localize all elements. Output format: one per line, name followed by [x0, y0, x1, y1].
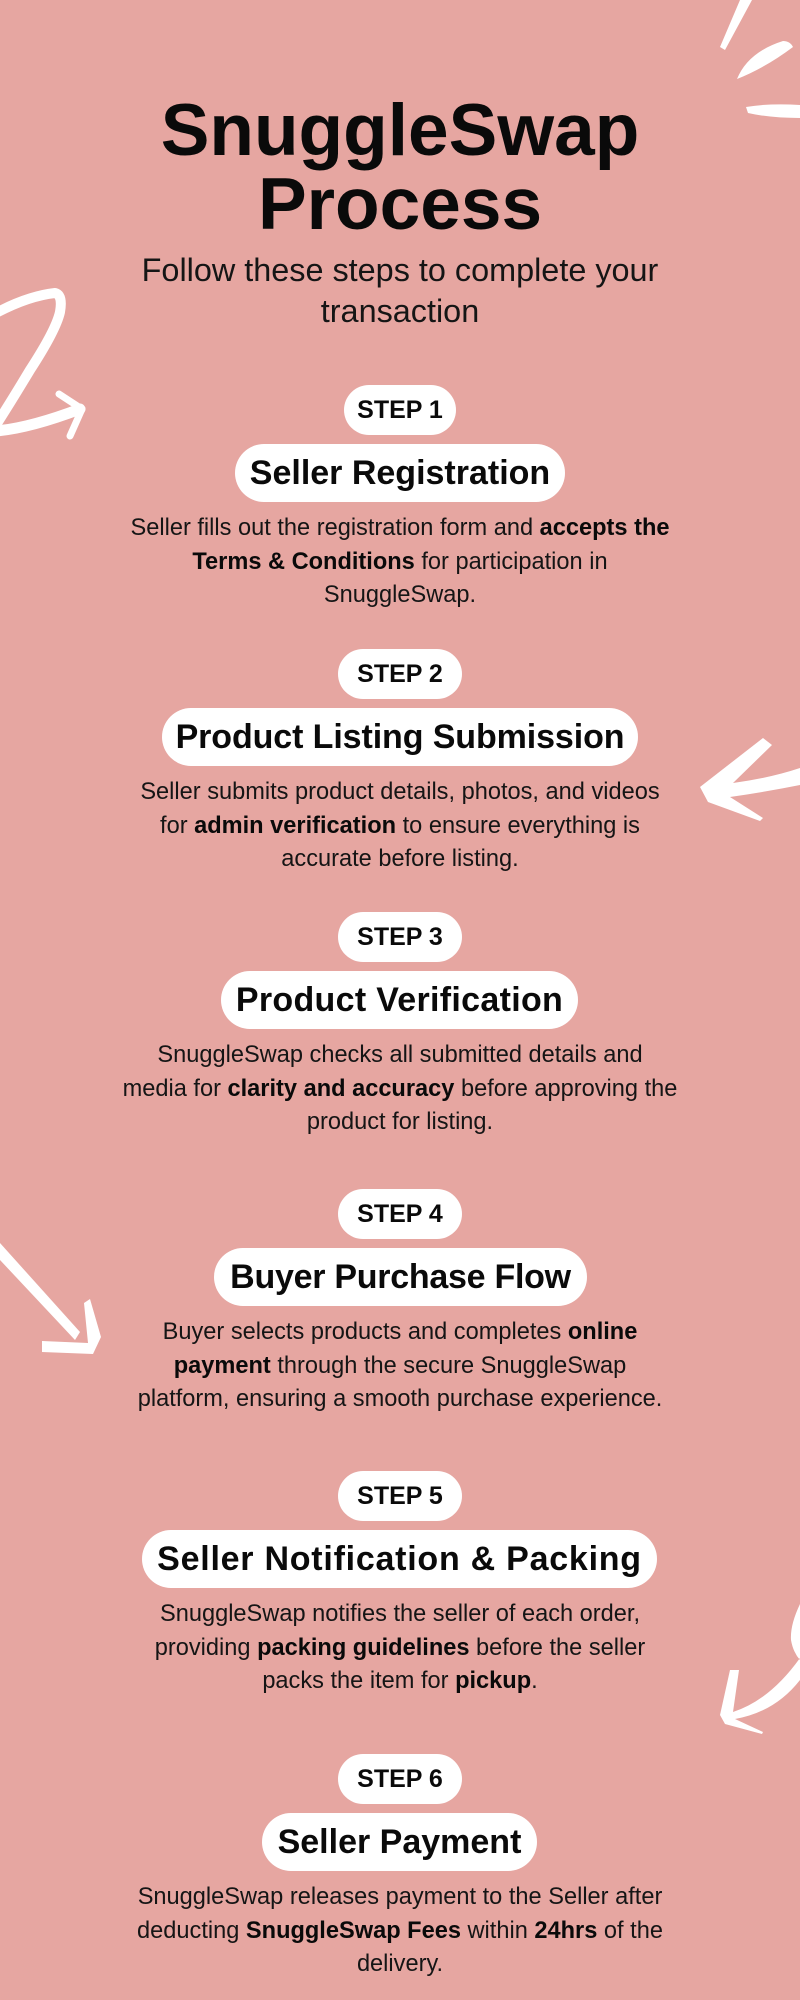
step 2 description: accurate before listing.: [281, 846, 519, 872]
step 6 heading: Seller Payment: [278, 1823, 521, 1861]
decorative arrow: pointing down-left beside step 5: [720, 1604, 800, 1734]
step 5 description: packs the item for pickup.: [262, 1668, 538, 1694]
step 5 heading: Seller Notification & Packing: [157, 1540, 642, 1578]
subtitle: Follow these steps to complete your: [142, 252, 658, 288]
title: [161, 90, 639, 245]
step 3 label: [338, 912, 462, 962]
step 2 label: [338, 649, 462, 699]
decorative arrow: pointing left beside step 2: [700, 738, 800, 821]
title: SnuggleSwap: [161, 90, 639, 171]
step 1 heading: [235, 444, 565, 502]
step 1 label: [344, 385, 456, 435]
step 1 description: [130, 515, 669, 608]
step 5 label: STEP 5: [357, 1482, 443, 1510]
step 4 description: payment through the secure SnuggleSwap: [174, 1352, 626, 1378]
step 4: [138, 1189, 662, 1412]
step 3 description: product for listing.: [307, 1109, 493, 1135]
step 1 description: Terms & Conditions for participation in: [192, 548, 608, 574]
step 5: [142, 1471, 657, 1694]
step 4 label: STEP 4: [357, 1200, 443, 1228]
decorative arrow: pointing down-right beside step 4: [0, 1243, 101, 1354]
step 6 description: [137, 1884, 663, 1977]
step 5 description: SnuggleSwap notifies the seller of each order,: [160, 1601, 640, 1627]
step 5 description: [155, 1601, 645, 1694]
step 3 label: STEP 3: [357, 923, 443, 951]
step 2 description: [140, 779, 660, 872]
step 2 heading: [162, 708, 638, 766]
step 6 description: delivery.: [357, 1951, 443, 1977]
step 6 description: deducting SnuggleSwap Fees within 24hrs of the: [137, 1918, 663, 1944]
step 2 description: for admin verification to ensure everything is: [160, 812, 640, 838]
step 3 description: SnuggleSwap checks all submitted details and: [157, 1042, 643, 1068]
step 2: [140, 649, 660, 872]
step 3 description: media for clarity and accuracy before approving the: [123, 1076, 677, 1102]
step 6: [137, 1754, 663, 1977]
step 6 label: STEP 6: [357, 1765, 443, 1793]
step 1: [130, 385, 669, 608]
step 6 heading: [262, 1813, 537, 1871]
step 3 heading: [221, 971, 578, 1029]
step 5 description: providing packing guidelines before the seller: [155, 1634, 645, 1660]
step 1 heading: Seller Registration: [250, 454, 550, 492]
step 1 description: SnuggleSwap.: [324, 582, 476, 608]
step 4 description: [138, 1319, 662, 1412]
step 5 heading: [142, 1530, 657, 1588]
step 1 label: STEP 1: [357, 396, 443, 424]
step 4 heading: Buyer Purchase Flow: [230, 1258, 571, 1296]
step 2 label: STEP 2: [357, 660, 443, 688]
decorative arrow: upper-left zigzag: [0, 288, 86, 440]
step 3: [123, 912, 677, 1135]
step 6 description: SnuggleSwap releases payment to the Seller after: [138, 1884, 662, 1910]
step 4 label: [338, 1189, 462, 1239]
step 6 label: [338, 1754, 462, 1804]
step 4 description: Buyer selects products and completes online: [163, 1319, 637, 1345]
step 3 description: [123, 1042, 677, 1135]
step 3 heading: Product Verification: [236, 981, 563, 1019]
subtitle: [142, 252, 658, 329]
step 4 description: platform, ensuring a smooth purchase experience.: [138, 1386, 662, 1412]
step 1 description: Seller fills out the registration form and accepts the: [130, 515, 669, 541]
step 4 heading: [214, 1248, 587, 1306]
step 5 label: [338, 1471, 462, 1521]
step 2 description: Seller submits product details, photos, and videos: [140, 779, 660, 805]
subtitle: transaction: [321, 293, 479, 329]
title: Process: [258, 164, 542, 245]
decorative arrow: top-right burst: [720, 0, 800, 118]
step 2 heading: Product Listing Submission: [176, 718, 624, 756]
